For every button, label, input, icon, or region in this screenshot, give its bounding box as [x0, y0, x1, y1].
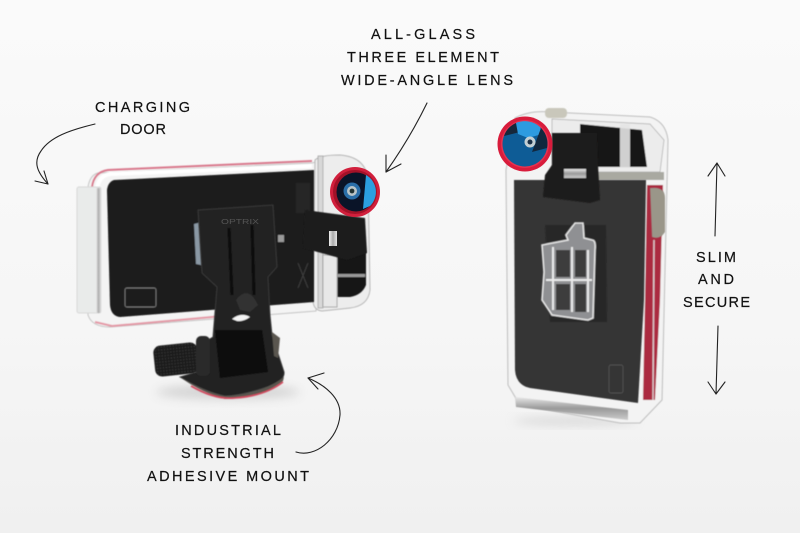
- label: wide-angle lens: THREE ELEMENT: [347, 50, 499, 66]
- bracket pin: [329, 231, 337, 246]
- label: charging door: DOOR: [120, 122, 166, 138]
- left device lens bracket: [303, 210, 367, 260]
- callout: slim and secure: [683, 163, 750, 394]
- left device transparent case: [77, 155, 370, 327]
- callout: wide-angle lens: [341, 27, 513, 172]
- left device: case on adhesive mount: [77, 155, 380, 399]
- adjustment knob: [153, 336, 210, 377]
- label: adhesive mount: INDUSTRIAL: [175, 423, 281, 439]
- callout: adhesive mount: [147, 373, 340, 485]
- label: charging door: CHARGING: [95, 100, 190, 116]
- bottom hinge: [515, 365, 628, 420]
- arrow: to lens: [386, 103, 427, 172]
- callout: charging door: [35, 100, 190, 184]
- label: slim and secure: [683, 250, 750, 311]
- label: adhesive mount: [147, 423, 309, 485]
- left device clip mount: [180, 205, 284, 399]
- label: charging door: [95, 100, 190, 138]
- clear mount plate: [542, 223, 607, 322]
- arrow: up: [708, 163, 725, 236]
- left device black plate: [107, 170, 366, 317]
- brand mark on clip: OPTRIX: [221, 219, 259, 226]
- label: wide-angle lens: ALL-GLASS: [371, 27, 475, 43]
- right device lens bracket: [543, 133, 600, 203]
- arrow: to charging door: [35, 124, 95, 184]
- label: wide-angle lens: [341, 27, 513, 89]
- side button: [650, 188, 665, 238]
- label: wide-angle lens: WIDE-ANGLE LENS: [341, 73, 513, 89]
- right device wide-angle lens: [498, 116, 552, 172]
- label: slim and secure: SLIM: [696, 250, 736, 266]
- arrow: down: [708, 326, 725, 394]
- left device wide-angle lens: [330, 167, 380, 217]
- label: adhesive mount: STRENGTH: [181, 446, 274, 462]
- label: slim and secure: AND: [698, 272, 734, 288]
- right device transparent case: [506, 108, 668, 423]
- arrow: to mount: [296, 373, 340, 453]
- right device: case back view: [498, 108, 668, 425]
- right device grey plate: [514, 180, 646, 403]
- label: slim and secure: SECURE: [683, 295, 750, 311]
- label: adhesive mount: ADHESIVE MOUNT: [147, 469, 309, 485]
